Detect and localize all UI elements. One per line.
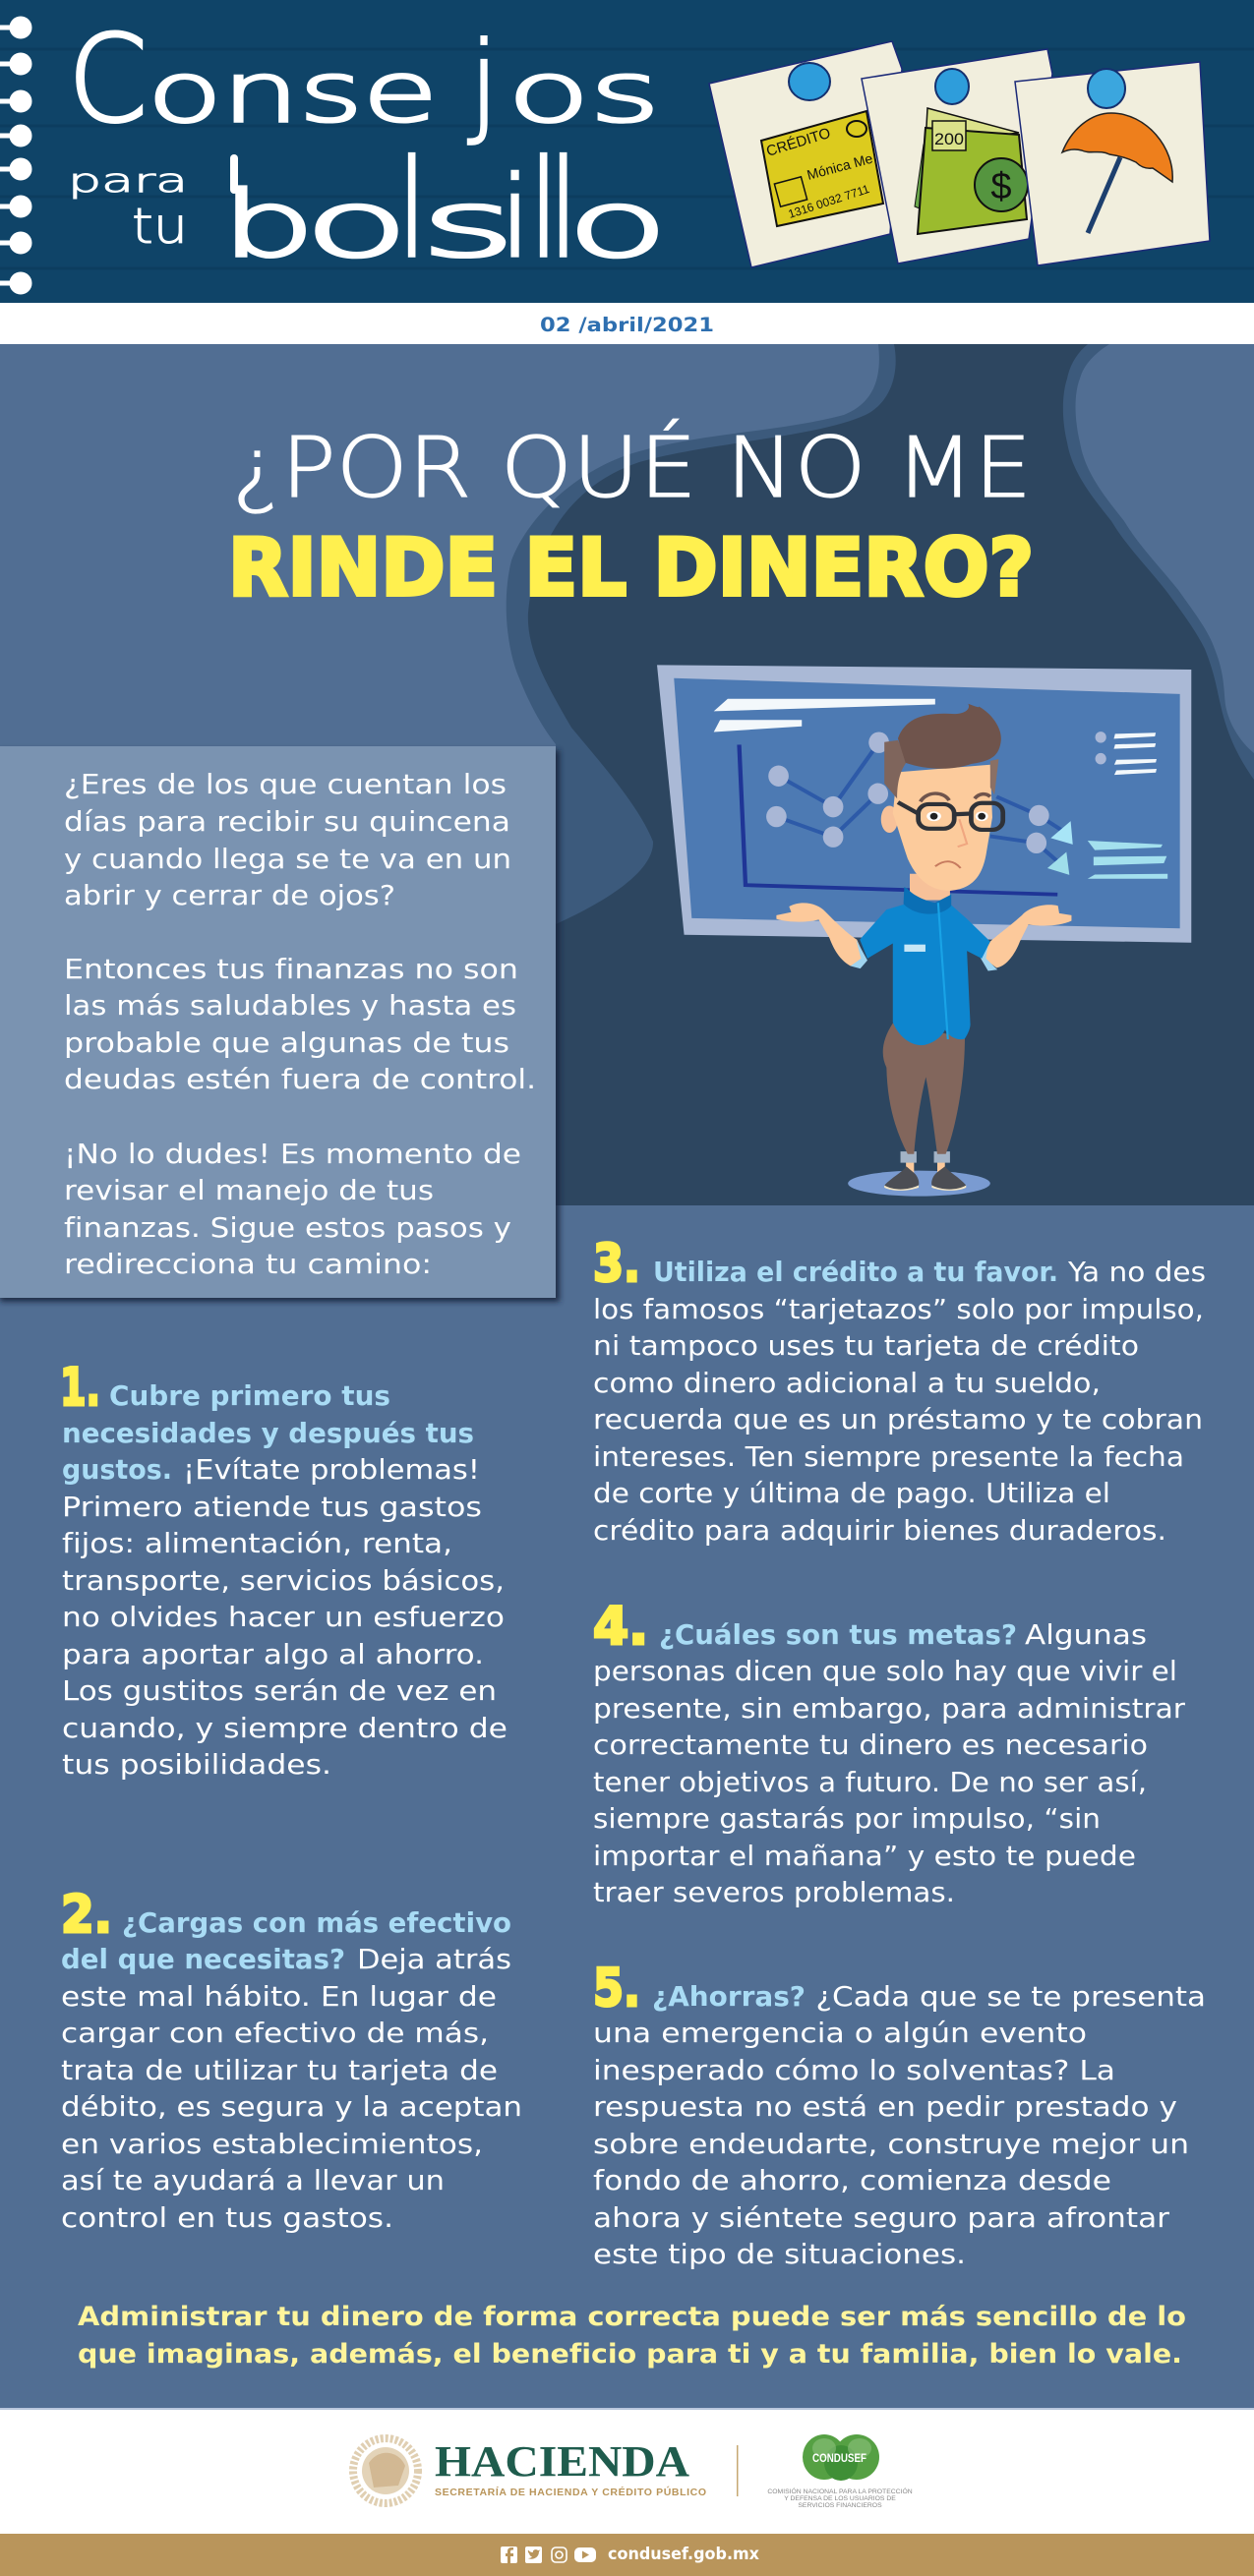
panel: intro box: deudas estén fuera de control.	[64, 1063, 536, 1095]
step 5: inesperado cómo lo solventas? La	[593, 2055, 1115, 2086]
title: tu: tu	[132, 198, 188, 255]
logo text: hacienda: HACIENDA	[435, 2437, 689, 2486]
step 1: Cubre primero tus	[109, 1380, 390, 1412]
step 5: ¿Cada que se te presenta	[816, 1981, 1206, 2013]
step 5: sobre endeudarte, construye mejor un	[593, 2129, 1189, 2160]
icon: twitter	[525, 2547, 542, 2563]
panel: intro box	[0, 746, 560, 1302]
icon: youtube	[574, 2547, 596, 2562]
title: bolsillo	[221, 133, 668, 288]
panel: intro box: días para recibir su quincena	[64, 805, 510, 838]
panel: intro box: ¿Eres de los que cuentan los	[64, 768, 507, 800]
step 2	[61, 1885, 522, 2234]
logo: condusef	[767, 2434, 913, 2509]
step 2: ¿Cargas con más efectivo	[122, 1907, 511, 1939]
website: condusef.gob.mx	[608, 2545, 759, 2563]
step 3: Utiliza el crédito a tu favor.	[653, 1257, 1058, 1288]
footer gold bar	[0, 2534, 1254, 2576]
note: banknote	[862, 49, 1052, 263]
step 4: Algunas	[1025, 1619, 1147, 1651]
logo text: secretaria: SECRETARÍA DE HACIENDA Y CRÉDITO PÚBLICO	[435, 2486, 706, 2498]
step 4: importar el mañana” y esto te puede	[593, 1841, 1136, 1872]
step 1: 1.	[60, 1358, 100, 1418]
panel: intro box: las más saludables y hasta es	[64, 989, 516, 1022]
panel: intro box: probable que algunas de tus	[64, 1026, 509, 1059]
logo: condusef: COMISIÓN NACIONAL PARA LA PROTECCIÓN	[767, 2487, 913, 2495]
step 5: 5.	[593, 1959, 640, 2019]
footer logos band	[0, 2408, 1254, 2534]
step 1: no olvides hacer un esfuerzo	[62, 1602, 505, 1633]
heading: rinde el dinero: RINDE EL DINERO?	[228, 522, 1034, 614]
title: Consejos: C	[68, 10, 148, 149]
step 1: transporte, servicios básicos,	[62, 1565, 505, 1597]
step 4: presente, sin embargo, para administrar	[593, 1693, 1186, 1725]
step 3: 3.	[593, 1234, 640, 1294]
date bar: 02 /abril/2021	[540, 314, 714, 336]
logo: condusef: SERVICIOS FINANCIEROS	[798, 2502, 882, 2509]
step 5: fondo de ahorro, comienza desde	[593, 2165, 1111, 2196]
title: bolsillo: s	[421, 172, 515, 277]
title: Consejos: os	[508, 44, 660, 141]
note: banknote: $	[990, 166, 1012, 207]
note: credit card: Mónica Me	[806, 150, 874, 183]
step 3: Ya no des	[1067, 1257, 1206, 1288]
step 1	[60, 1358, 508, 1781]
closing message: que imaginas, además, el beneficio para ti y a tu familia, bien lo vale.	[78, 2339, 1182, 2370]
panel: intro box: y cuando llega se te va en un	[64, 843, 511, 875]
title: bolsillo: l	[397, 133, 427, 288]
panel: intro box: Entonces tus finanzas no son	[64, 953, 518, 985]
step 4: siempre gastarás por impulso, “sin	[593, 1803, 1101, 1835]
step 5	[593, 1959, 1206, 2270]
step 5: una emergencia o algún evento	[593, 2018, 1087, 2049]
step 2: Deja atrás	[357, 1944, 511, 1975]
step 1: tus posibilidades.	[62, 1749, 331, 1781]
note: credit card: CRÉDITO	[764, 125, 832, 160]
step 4: traer severos problemas.	[593, 1877, 955, 1908]
step 4: ¿Cuáles son tus metas?	[659, 1619, 1017, 1651]
step 1: cuando, y siempre dentro de	[62, 1713, 508, 1744]
note: banknote: 200	[934, 130, 964, 148]
title: para: para	[68, 161, 188, 200]
step 1: fijos: alimentación, renta,	[62, 1528, 452, 1559]
header banner	[0, 0, 1254, 303]
step 5: este tipo de situaciones.	[593, 2239, 966, 2270]
step 1: para aportar algo al ahorro.	[62, 1639, 484, 1670]
step 2: trata de utilizar tu tarjeta de	[61, 2055, 498, 2086]
step 3: como dinero adicional a tu sueldo,	[593, 1368, 1101, 1399]
logo: national seal	[353, 2438, 418, 2503]
icon: notebook spiral holes	[0, 17, 31, 294]
title: bolsillo: b	[221, 172, 315, 277]
step 3: intereses. Ten siempre presente la fecha	[593, 1441, 1184, 1473]
step 4: correctamente tu dinero es necesario	[593, 1729, 1148, 1761]
step 2: en varios establecimientos,	[61, 2129, 483, 2160]
logo: condusef: CONDUSEF	[812, 2453, 866, 2465]
title: bolsillo: o	[305, 172, 408, 277]
title: bolsillo: l	[529, 133, 559, 288]
heading: por que no me: ¿POR QUÉ NO ME	[232, 418, 1032, 517]
step 1: ¡Evítate problemas!	[183, 1454, 480, 1486]
panel: intro box: revisar el manejo de tus	[64, 1174, 434, 1206]
step 4: 4.	[593, 1597, 648, 1657]
panel: intro box: finanzas. Sigue estos pasos y	[64, 1211, 511, 1244]
step 2: este mal hábito. En lugar de	[61, 1981, 497, 2013]
title: bolsillo: l	[549, 133, 578, 288]
step 2: así te ayudará a llevar un	[61, 2165, 445, 2196]
panel: intro box: redirecciona tu camino:	[64, 1248, 432, 1280]
icon: facebook	[501, 2547, 517, 2563]
title: bolsillo: i	[501, 154, 530, 282]
closing message	[78, 2302, 1186, 2370]
step 5: ahora y siéntete seguro para afrontar	[593, 2202, 1170, 2234]
note: umbrella	[1015, 62, 1210, 265]
step 4	[593, 1597, 1186, 1908]
panel: intro box: abrir y cerrar de ojos?	[64, 879, 395, 911]
step 3: recuerda que es un préstamo y te cobran	[593, 1404, 1203, 1435]
step 3: ni tampoco uses tu tarjeta de crédito	[593, 1330, 1139, 1362]
illustration: presenter at chart board	[657, 665, 1191, 1197]
step 4: personas dicen que solo hay que vivir el	[593, 1656, 1177, 1687]
logo: condusef: Y DEFENSA DE LOS USUARIOS DE	[784, 2495, 896, 2502]
step 2: del que necesitas?	[61, 1944, 345, 1975]
step 3: los famosos “tarjetazos” solo por impulso,	[593, 1294, 1204, 1325]
step 1: gustos.	[62, 1454, 172, 1486]
note: credit card: 1316 0032 7711	[787, 182, 871, 221]
panel: intro box: ¡No lo dudes! Es momento de	[64, 1138, 521, 1170]
title: Consejos: onse	[148, 44, 438, 141]
step 1: Primero atiende tus gastos	[62, 1492, 482, 1523]
note: credit card	[709, 41, 902, 267]
step 4: tener objetivos a futuro. De no ser así,	[593, 1767, 1147, 1798]
chart board	[657, 665, 1191, 943]
step 3: crédito para adquirir bienes duraderos.	[593, 1515, 1166, 1547]
step 5: respuesta no está en pedir prestado y	[593, 2091, 1177, 2123]
step 1: Los gustitos serán de vez en	[62, 1675, 497, 1707]
person	[776, 704, 1071, 1197]
step 5: ¿Ahorras?	[652, 1981, 806, 2013]
icon: instagram	[552, 2547, 567, 2562]
closing message: Administrar tu dinero de forma correcta puede ser más sencillo de lo	[78, 2302, 1186, 2332]
title: bolsillo: o	[567, 172, 668, 277]
date bar	[0, 303, 1254, 344]
step 2: cargar con efectivo de más,	[61, 2018, 489, 2049]
step 3: de corte y última de pago. Utiliza el	[593, 1478, 1110, 1509]
step 2: control en tus gastos.	[61, 2202, 393, 2234]
step 1: necesidades y después tus	[62, 1418, 474, 1449]
step 2: débito, es segura y la aceptan	[61, 2091, 522, 2123]
title: Consejos: j	[467, 20, 498, 147]
step 3	[593, 1234, 1206, 1547]
step 2: 2.	[61, 1885, 112, 1945]
